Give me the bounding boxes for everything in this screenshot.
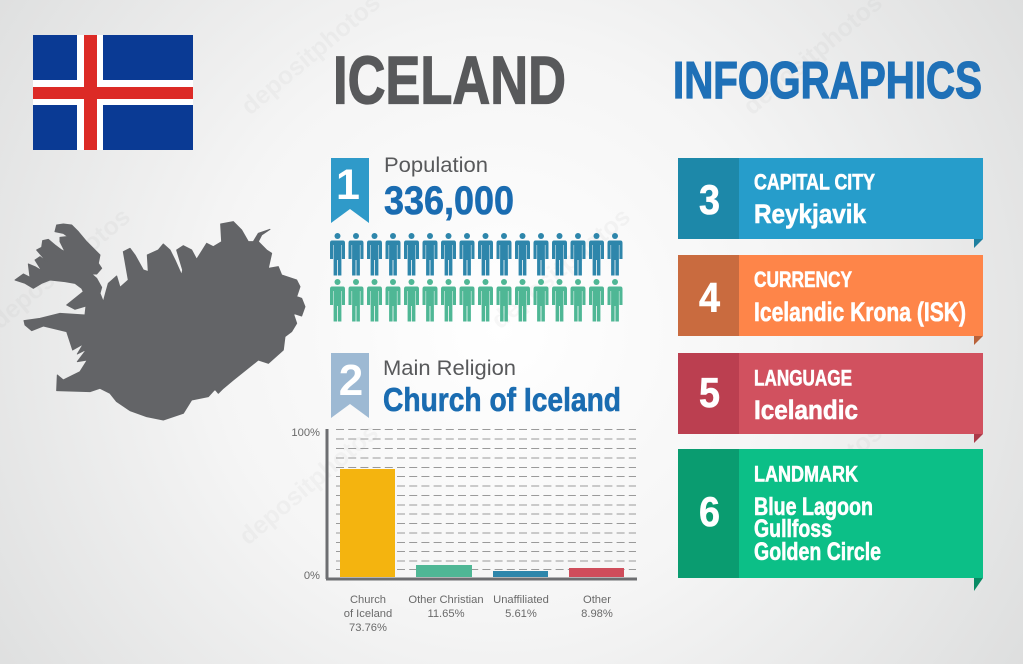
pictogram: green people row — [330, 279, 622, 322]
bar: Other Christian: Other Christian — [408, 594, 484, 606]
bar: Other Christian: 11.65% — [427, 608, 465, 620]
bar: Other Christian — [408, 565, 484, 620]
religion value: Church of Iceland — [383, 381, 621, 418]
bar: Church of Iceland: 73.76% — [349, 622, 387, 634]
population label: Population — [384, 154, 488, 177]
bar: Other: 8.98% — [581, 608, 613, 620]
title: Iceland: ICELAND — [333, 42, 566, 118]
panel: capital city: CAPITAL CITY — [754, 170, 875, 194]
panel: currency: 4 — [699, 274, 721, 321]
y-axis labels: 0% — [304, 570, 320, 582]
pictogram: blue people row — [330, 233, 622, 276]
bar: Unaffiliated: 5.61% — [505, 608, 537, 620]
population value: 336,000 — [384, 179, 514, 223]
panel: landmark: LANDMARK — [754, 462, 858, 486]
panel: landmark: 6 — [699, 488, 720, 535]
text: depositphotos — [738, 418, 888, 551]
bar: Church of Iceland: Church — [350, 594, 386, 606]
icon: ribbon 1: 1 — [336, 161, 360, 209]
panel: currency: Icelandic Krona (ISK) — [754, 297, 966, 327]
panel: currency: CURRENCY — [754, 267, 852, 292]
bar: Unaffiliated — [493, 571, 549, 620]
panel: capital city: 3 — [699, 176, 720, 223]
bar chart — [291, 427, 637, 634]
panel: main religion — [291, 353, 637, 634]
panel: landmark — [678, 449, 983, 591]
bar: Other — [569, 568, 624, 620]
icon: ribbon 1 — [331, 158, 369, 223]
icon: ribbon 2: 2 — [339, 356, 363, 405]
panel: landmark: Blue Lagoon — [754, 493, 873, 521]
map of Iceland — [15, 222, 305, 420]
panel: landmark: Golden Circle — [754, 538, 881, 566]
panel: population — [330, 154, 622, 322]
y-axis labels: 100% — [291, 427, 320, 439]
panel: language: 5 — [699, 369, 720, 416]
panel: capital city: Reykjavik — [754, 199, 867, 229]
bar: Unaffiliated: Unaffiliated — [493, 594, 549, 606]
bar: Other: Other — [583, 594, 611, 606]
panel: language — [678, 353, 983, 443]
text: depositphotos — [234, 418, 384, 551]
y-axis labels — [291, 427, 320, 582]
panel: currency — [678, 255, 983, 345]
text: depositphotos — [486, 202, 636, 335]
bar: Church of Iceland — [340, 469, 395, 634]
religion label: Main Religion — [383, 357, 516, 380]
panel: language: Icelandic — [754, 395, 858, 425]
panel: landmark: Gullfoss — [754, 515, 832, 543]
panel: capital city — [678, 158, 983, 248]
icon: ribbon 2 — [331, 353, 369, 418]
bar: Church of Iceland: of Iceland — [344, 608, 392, 620]
icon: flag of Iceland — [33, 35, 193, 150]
panel: language: LANGUAGE — [754, 366, 852, 390]
